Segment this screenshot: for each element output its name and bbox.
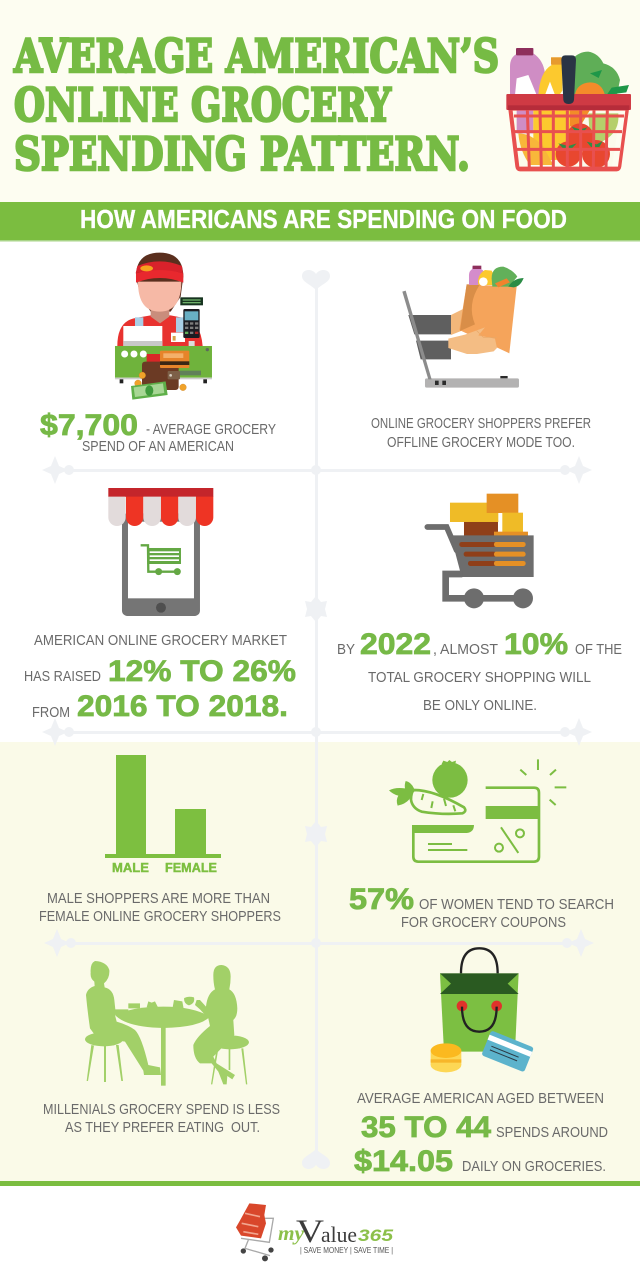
bar chart: male and female shoppers: MALE bbox=[112, 861, 149, 875]
panel: millennials eat out bbox=[43, 961, 280, 1136]
panel: online grocery market growth bbox=[24, 488, 296, 723]
panel: online shoppers prefer offline too bbox=[371, 266, 591, 451]
title: SPENDING PATTERN. bbox=[14, 127, 470, 181]
stat text: FROM bbox=[32, 705, 70, 721]
stat text: 35 TO 44 bbox=[361, 1111, 491, 1144]
stat text: OF THE bbox=[575, 642, 622, 658]
panel: 2022 online share bbox=[337, 494, 622, 714]
icon: shopping bag with coins and card bbox=[431, 948, 534, 1072]
footer divider bbox=[0, 1181, 640, 1186]
stat text: AVERAGE AMERICAN AGED BETWEEN bbox=[357, 1091, 604, 1107]
description text bbox=[39, 891, 281, 925]
stat text: 2016 TO 2018. bbox=[77, 690, 288, 723]
description text: FEMALE ONLINE GROCERY SHOPPERS bbox=[39, 909, 281, 925]
icon: loaded shopping cart bbox=[427, 494, 534, 608]
icon: smartphone storefront bbox=[108, 488, 213, 616]
stat text bbox=[40, 409, 276, 455]
title bbox=[13, 29, 499, 181]
stat text: - AVERAGE GROCERY bbox=[146, 422, 276, 438]
panel: women search for coupons bbox=[349, 759, 614, 931]
stat text: AMERICAN ONLINE GROCERY MARKET bbox=[34, 633, 287, 649]
stat text: 12% TO 26% bbox=[108, 655, 296, 688]
icon: grocery basket bbox=[506, 48, 631, 171]
stat text bbox=[354, 1091, 608, 1178]
stat text bbox=[337, 628, 622, 714]
stat text: $7,700 bbox=[40, 409, 138, 442]
stat text: 10% bbox=[504, 628, 568, 661]
icon: groceries handed out of laptop bbox=[402, 266, 524, 388]
description text bbox=[371, 416, 591, 451]
stat text: TOTAL GROCERY SHOPPING WILL bbox=[368, 670, 591, 686]
logo: myValue365: V bbox=[296, 1214, 324, 1250]
icon: cashier at counter bbox=[115, 253, 212, 400]
icon: two women at a cafe table bbox=[85, 961, 249, 1086]
description text: AS THEY PREFER EATING OUT. bbox=[65, 1120, 260, 1136]
stat text: FOR GROCERY COUPONS bbox=[401, 915, 566, 931]
stat text: SPENDS AROUND bbox=[496, 1125, 608, 1141]
logo: myValue365 bbox=[236, 1203, 394, 1261]
description text: MALE SHOPPERS ARE MORE THAN bbox=[47, 891, 270, 907]
stat text: BE ONLY ONLINE. bbox=[423, 698, 537, 714]
stat text: 2022 bbox=[360, 628, 431, 661]
stat text: OF WOMEN TEND TO SEARCH bbox=[419, 897, 614, 913]
logo: myValue365: my bbox=[278, 1223, 304, 1245]
icon: logo cart bbox=[236, 1203, 274, 1261]
stat text: $14.05 bbox=[354, 1145, 453, 1178]
icon: vegetables and coupon card bbox=[389, 759, 566, 862]
logo: myValue365: 365 bbox=[358, 1226, 394, 1245]
stat text: SPEND OF AN AMERICAN bbox=[82, 439, 234, 455]
panel: average grocery spend bbox=[40, 253, 276, 455]
panel: male vs female shoppers bbox=[39, 755, 281, 925]
stat text: , ALMOST bbox=[433, 642, 498, 658]
stat text: BY bbox=[337, 642, 355, 658]
description text: OFFLINE GROCERY MODE TOO. bbox=[387, 435, 575, 451]
stat text: 57% bbox=[349, 883, 414, 916]
bar chart: male and female shoppers bbox=[105, 755, 221, 875]
stat text bbox=[349, 883, 614, 931]
title: ONLINE GROCERY bbox=[14, 78, 392, 132]
logo: myValue365: | SAVE MONEY | SAVE TIME | bbox=[300, 1246, 393, 1255]
panel: aged 35 to 44 daily spend bbox=[354, 948, 608, 1178]
description text: MILLENIALS GROCERY SPEND IS LESS bbox=[43, 1102, 280, 1118]
stat text bbox=[24, 633, 296, 723]
stat text: DAILY ON GROCERIES. bbox=[462, 1159, 606, 1175]
logo: myValue365: alue bbox=[321, 1222, 357, 1247]
section banner: HOW AMERICANS ARE SPENDING ON FOOD bbox=[80, 206, 567, 234]
title: AVERAGE AMERICAN’S bbox=[13, 29, 499, 83]
stat text: HAS RAISED bbox=[24, 669, 101, 685]
section banner bbox=[0, 202, 640, 242]
bar chart: male and female shoppers: FEMALE bbox=[165, 861, 217, 875]
description text bbox=[43, 1102, 280, 1136]
